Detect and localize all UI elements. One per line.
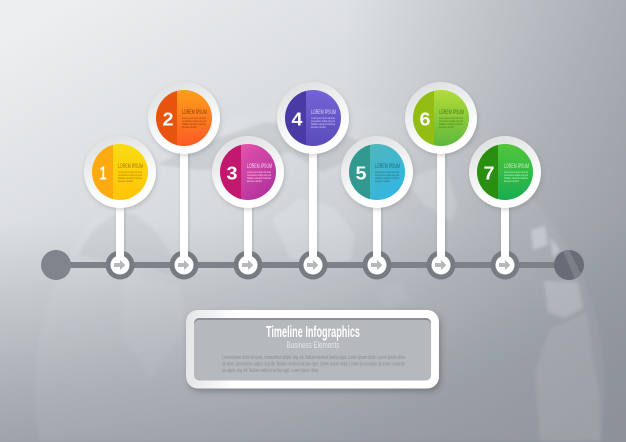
node 5 [362,240,392,280]
step 5: consectetur adipis cing elit [375,174,399,177]
step 2: Nullam eleifend lacinia [182,123,207,126]
step 7: 7 [484,164,494,184]
step 1: 1 [100,164,106,184]
step 3: 3 [226,164,238,184]
step 2: consectetur adipis cing elit [182,120,206,123]
timeline bar [56,262,569,268]
step 4: 4 [292,110,302,130]
step 5: ipsum dolor [375,180,390,183]
panel title: Timeline Infographics [266,324,360,341]
panel inset [194,318,431,380]
step 1: consectetur adipis cing elit [118,174,142,177]
stem 7 [501,200,509,265]
badge 6 [405,82,477,154]
step 3: Lorem ipsum dolor sit amet [247,171,271,174]
step 5 [341,136,413,280]
step 1: LOREM IPSUM [118,164,143,170]
step 5: Nullam eleifend lacinia [375,177,400,180]
step 1 [84,136,156,280]
step 7: Nullam eleifend lacinia [504,177,529,180]
end dot [554,250,584,280]
badge 2 [148,82,220,154]
step 7: LOREM IPSUM [504,164,529,170]
panel subtitle: Business Elements [286,340,340,351]
stem 2 [180,146,188,265]
panel body text [222,355,405,374]
step 1: Lorem ipsum dolor sit amet [118,171,142,174]
step 2: LOREM IPSUM [182,110,207,116]
panel frame [186,310,439,388]
step 7: consectetur adipis cing elit [504,174,528,177]
badge 4 [277,82,349,154]
world globe map [35,104,605,441]
node 7 [490,240,520,280]
node 1 [106,240,134,280]
step 3: Nullam eleifend lacinia [247,177,272,180]
stem 4 [309,146,317,265]
step 4: ipsum dolor [311,126,326,129]
panel body text: sit amet, consectetur adipis cing elit. Nullam eleifend lacinia eget. Lorem ipsum dolor. Lorem ipsum dolor sit amet, consecte [222,362,405,368]
panel body text: Lorem ipsum dolor sit amet, consectetur adipis cing elit. Nullam eleifend lacinia eget. Lorem ipsum dolor. Lorem ipsum dolor [222,355,405,361]
step 2: ipsum dolor [182,126,197,129]
stem 1 [116,200,124,265]
step 4: consectetur adipis cing elit [311,120,335,123]
badge 5 [341,136,413,208]
step 6: ipsum dolor [439,126,454,129]
step 3: ipsum dolor [247,180,262,183]
step 6 [405,82,477,280]
step 1: ipsum dolor [118,180,133,183]
step 5: 5 [356,164,366,184]
step 2 [148,82,220,280]
title panel [186,310,439,388]
step 5: Lorem ipsum dolor sit amet [375,171,399,174]
step 4: Nullam eleifend lacinia [311,123,336,126]
step 2: 2 [162,110,174,130]
step 4: LOREM IPSUM [311,110,336,116]
step 7 [469,136,541,280]
step 3: LOREM IPSUM [247,164,272,170]
step 6: Nullam eleifend lacinia [439,123,464,126]
step 7: ipsum dolor [504,180,519,183]
stem 6 [437,146,445,265]
step 5: LOREM IPSUM [375,164,400,170]
step 6: 6 [420,110,430,130]
stem 5 [373,200,381,265]
step 3: consectetur adipis cing elit [247,174,271,177]
node 6 [426,240,456,280]
step 3 [212,136,284,280]
node 3 [234,240,262,280]
step 6: Lorem ipsum dolor sit amet [439,117,463,120]
badge 7 [469,136,541,208]
step 6: consectetur adipis cing elit [439,120,463,123]
stem 3 [244,200,252,265]
step 1: Nullam eleifend lacinia [118,177,143,180]
step 7: Lorem ipsum dolor sit amet [504,171,528,174]
badge 3 [212,136,284,208]
step 4 [277,82,349,280]
step 2: Lorem ipsum dolor sit amet [182,117,206,120]
node 2 [170,240,198,280]
start dot [41,250,71,280]
panel body text: tur adipis cing elit. Nullam eleifend lacinia eget. Lorem ipsum dolor. [222,368,319,374]
step 4: Lorem ipsum dolor sit amet [311,117,335,120]
badge 1 [84,136,156,208]
step 6: LOREM IPSUM [439,110,464,116]
node 4 [298,240,328,280]
